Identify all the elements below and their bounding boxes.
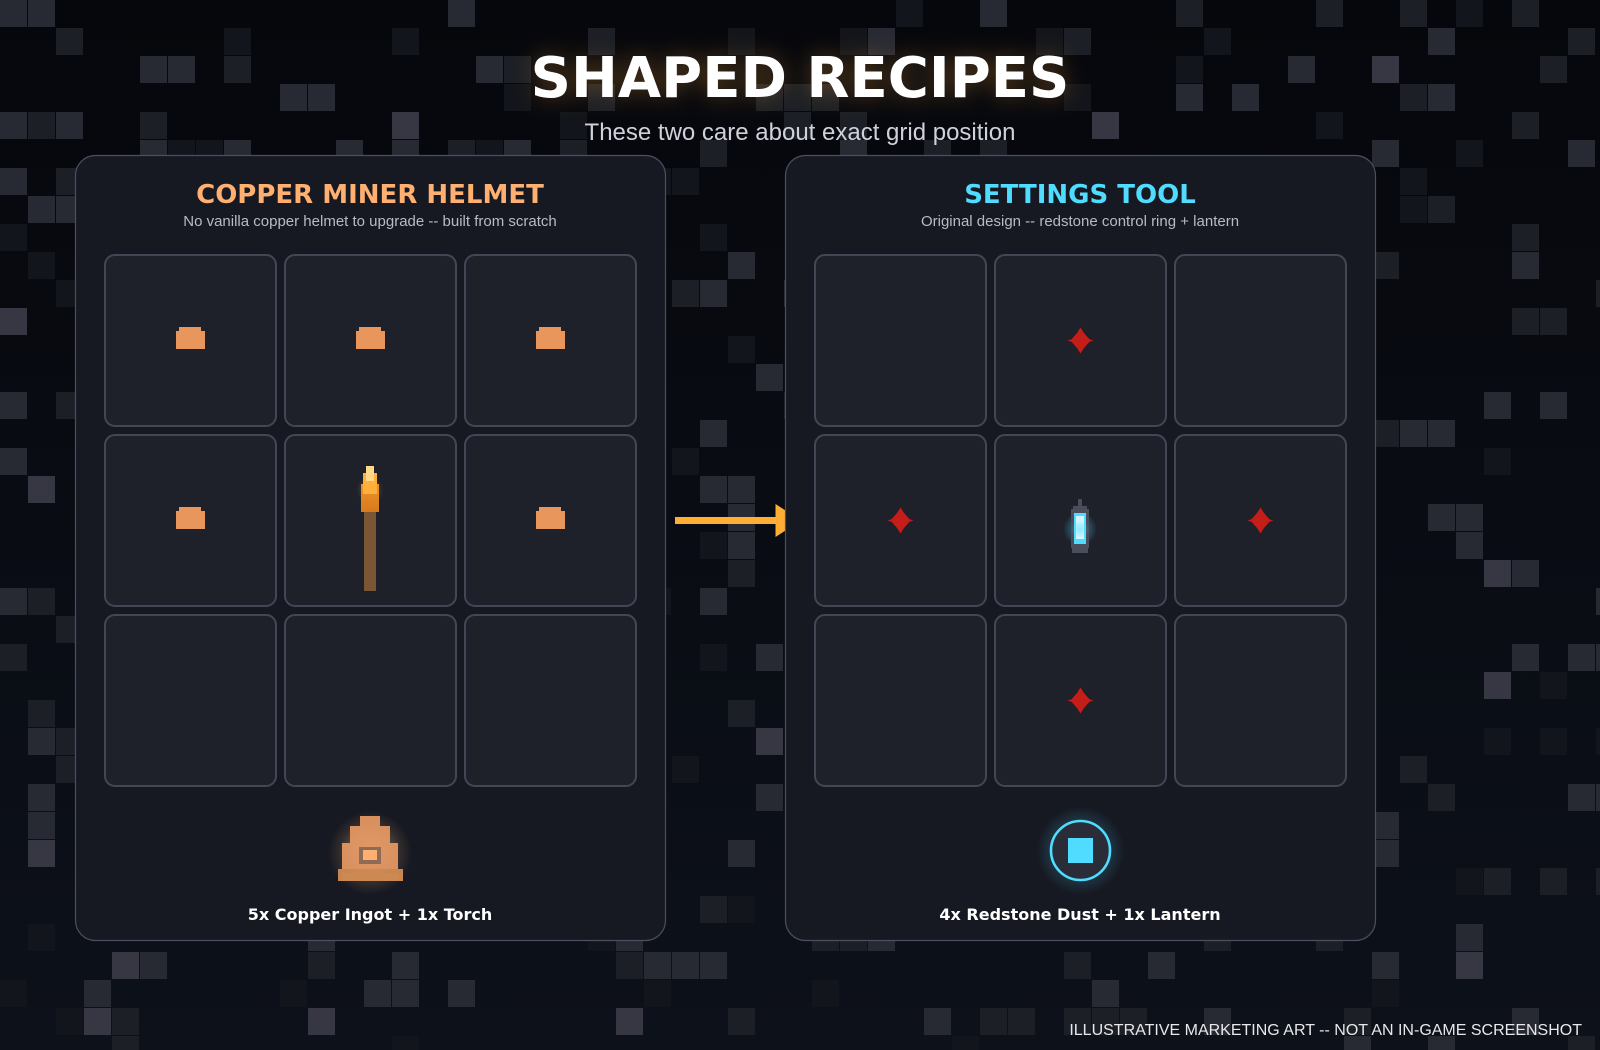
icon: redstone dust, middle right [1248,508,1274,534]
panel heading: settings tool: SETTINGS TOOL [964,180,1196,210]
panel subheading: settings tool: Original design -- redstone control ring + lantern [921,213,1239,230]
result icon: settings tool [1036,806,1124,894]
icon: copper ingot, top right [536,327,565,349]
recipe caption: copper miner helmet: 5x Copper Ingot + 1x Torch [248,905,492,924]
icon: copper ingot, top centre [356,327,385,349]
icon: copper ingot, top left [176,327,205,349]
icon: redstone dust, top centre [1068,328,1094,354]
recipe caption: settings tool: 4x Redstone Dust + 1x Lantern [939,905,1221,924]
footer disclaimer: ILLUSTRATIVE MARKETING ART -- NOT AN IN-GAME SCREENSHOT [1069,1022,1582,1039]
title: SHAPED RECIPES [531,46,1069,111]
subtitle: These two care about exact grid position [585,119,1015,146]
icon: redstone dust, middle left [888,508,914,534]
panel subheading: copper miner helmet: No vanilla copper helmet to upgrade -- built from scratch [183,213,557,230]
icon: copper ingot, middle right [536,507,565,529]
result icon: copper helmet [328,811,412,895]
icon: torch [356,466,384,591]
icon: lantern [1063,499,1097,553]
crafting grid: settings tool [815,255,1346,786]
icon: copper ingot, middle left [176,507,205,529]
panel heading: copper miner helmet: COPPER MINER HELMET [196,180,544,210]
crafting grid: copper miner helmet [105,255,636,786]
arrow between panels [675,504,801,537]
panel: settings tool [786,156,1376,940]
panel: copper miner helmet [76,156,666,940]
icon: redstone dust, bottom centre [1068,688,1094,714]
